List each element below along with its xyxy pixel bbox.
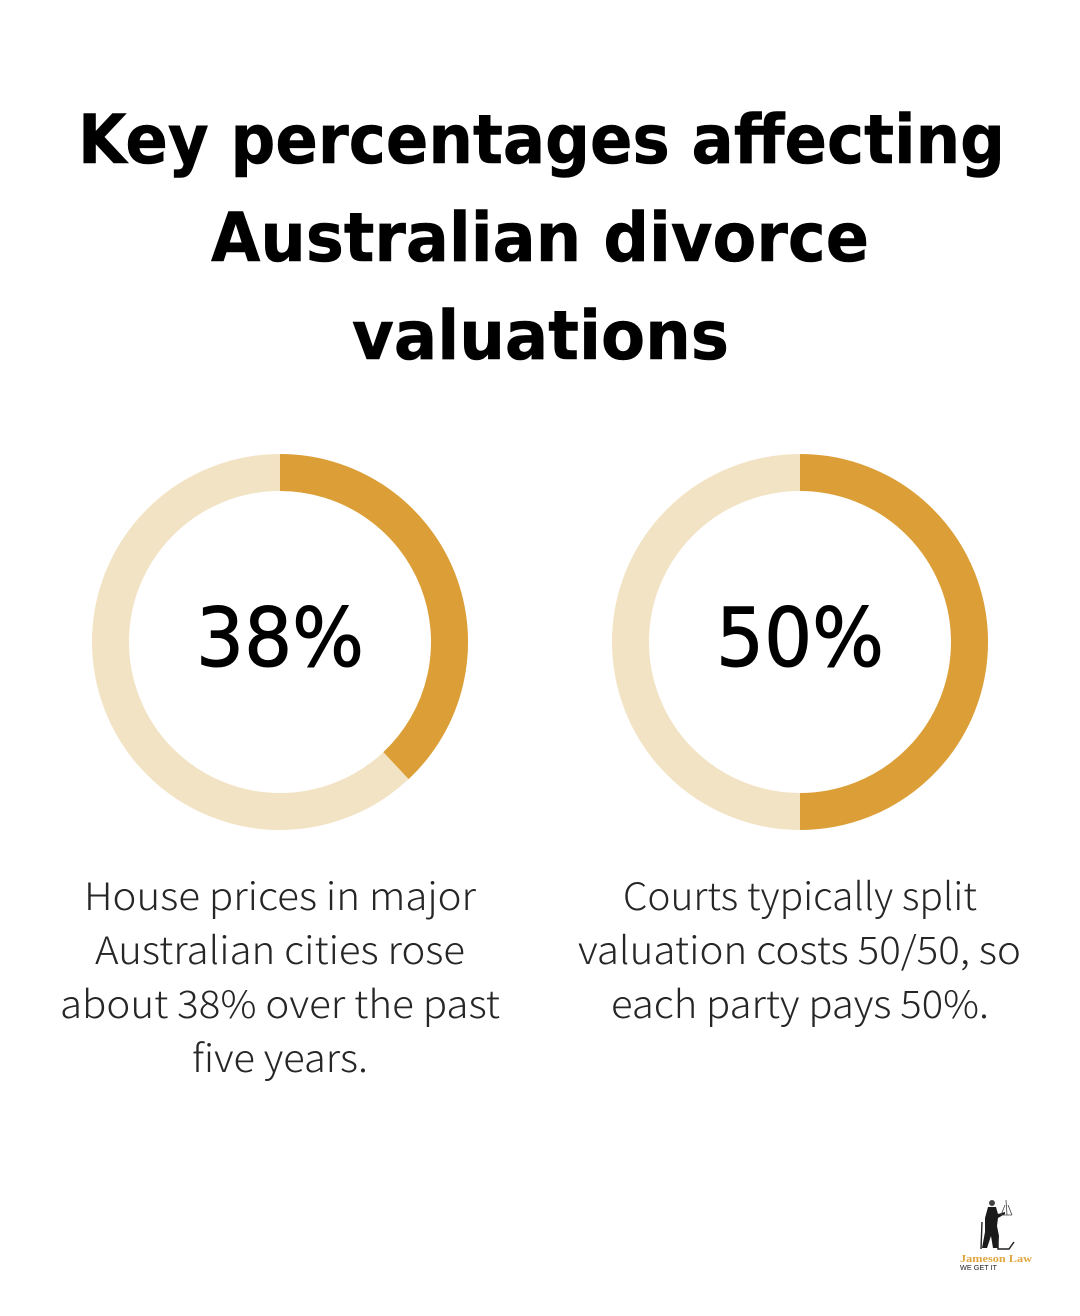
description: valuation costs: valuation costs 50/50, so [578,920,1021,975]
title: valuations [352,297,729,376]
value: 38%: 38% [196,592,364,686]
description: valuation costs [578,866,1021,1029]
value: 50%: 50% [716,592,884,686]
description: valuation costs: each party pays 50%. [611,974,989,1029]
donut chart: 50% [630,472,970,812]
title [78,101,1005,376]
description: house prices: five years. [192,1028,368,1083]
icon: lady justice [981,1200,1014,1249]
tagline: WE GET IT [960,1265,998,1272]
brand name: Jameson Law [960,1253,1032,1265]
panel: 38% house prices [60,472,500,1083]
donut chart: 38% [110,472,450,812]
description: house prices [60,866,500,1083]
title: Australian divorce [211,199,869,278]
description: house prices: about 38% over the past [60,974,500,1029]
description: house prices: House prices in major [84,866,476,921]
description: house prices: Australian cities rose [95,920,465,975]
description: valuation costs: Courts typically split [623,866,977,921]
logo: Jameson Law [960,1200,1032,1272]
panel: 50% valuation costs [578,472,1021,1029]
title: Key percentages affecting [78,101,1005,180]
